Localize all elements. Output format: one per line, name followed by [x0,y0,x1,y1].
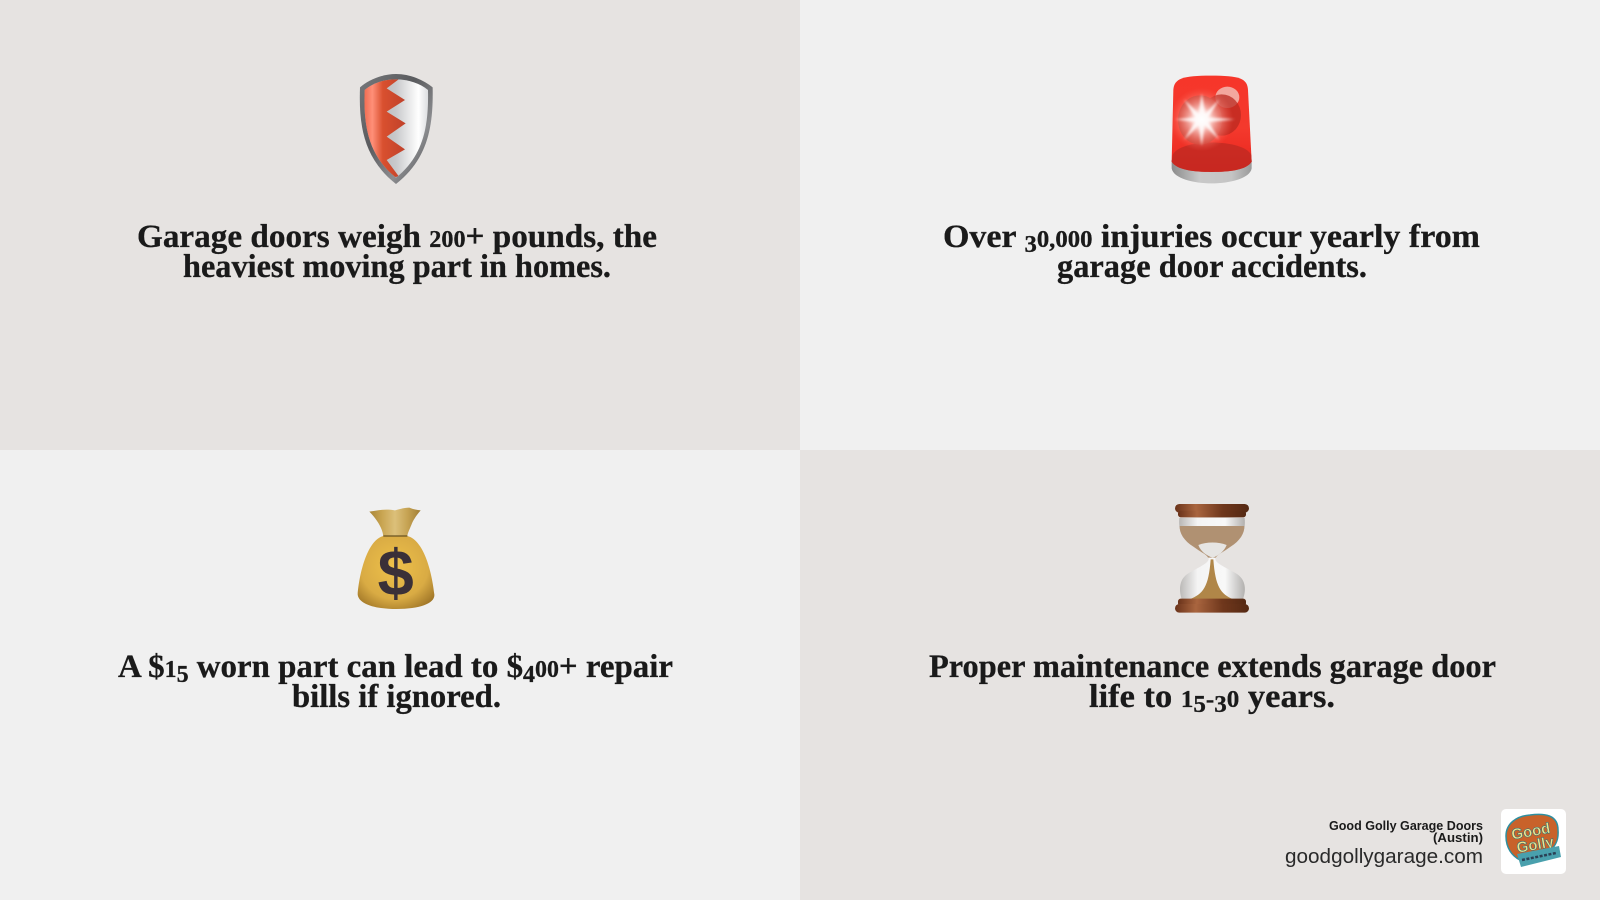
website: goodgollygarage.com [1285,846,1483,868]
heading: door weight fact: Garage doors weigh 200+ pounds, the [137,219,657,255]
heading: repair cost fact [118,649,673,715]
heading: maintenance fact: life to 1 [1089,679,1193,715]
icon: money bag [358,508,434,609]
heading: repair cost fact: bills if ignored. [292,679,501,715]
heading: injuries fact: injuries occur yearly from [1101,219,1469,255]
heading: maintenance fact: 5 [1193,692,1206,718]
heading: maintenance fact: 0 [1227,687,1239,713]
heading: door weight fact [137,219,657,285]
panel background [0,0,800,450]
company name: (Austin) [1433,831,1483,845]
heading: maintenance fact: 3 [1214,692,1227,718]
panel: maintenance [800,450,1600,900]
heading: maintenance fact: years. [1248,679,1331,715]
panel: door weight [0,0,800,450]
icon: siren light [1170,76,1252,183]
heading: maintenance fact: Proper maintenance extends garage door [929,649,1496,685]
heading: injuries fact: garage door accidents. [1057,249,1367,285]
heading: repair cost fact: + repair [559,649,673,685]
heading: injuries fact: 0,000 [1037,227,1092,253]
panel: injuries [800,0,1600,450]
panel background [800,0,1600,450]
heading: door weight fact: heaviest moving part in homes. [183,249,611,285]
logo: Golly [1515,833,1556,857]
logo [1501,809,1566,874]
panel: repair cost [0,450,800,900]
heading: repair cost fact: 4 [523,662,535,688]
heading: injuries fact [943,219,1480,285]
heading: repair cost fact: A $1 [118,649,177,685]
heading: maintenance fact: - [1206,687,1214,713]
footer: company branding [1285,809,1566,874]
logo: Good [1510,820,1552,844]
panel background [800,450,1600,900]
heading: repair cost fact: 5 [177,662,189,688]
heading: maintenance fact [929,649,1496,718]
icon: shield [360,74,433,184]
company name: Good Golly Garage Doors [1329,819,1483,833]
heading: repair cost fact: 00 [535,657,559,683]
company name [1329,819,1483,845]
heading: injuries fact: 3 [1024,232,1037,258]
heading: repair cost fact: worn part can lead to $ [189,649,523,685]
icon: money bag: $ [378,536,414,609]
icon: hourglass [1175,504,1249,613]
heading: injuries fact: Over [943,219,1014,255]
panel background [0,450,800,900]
